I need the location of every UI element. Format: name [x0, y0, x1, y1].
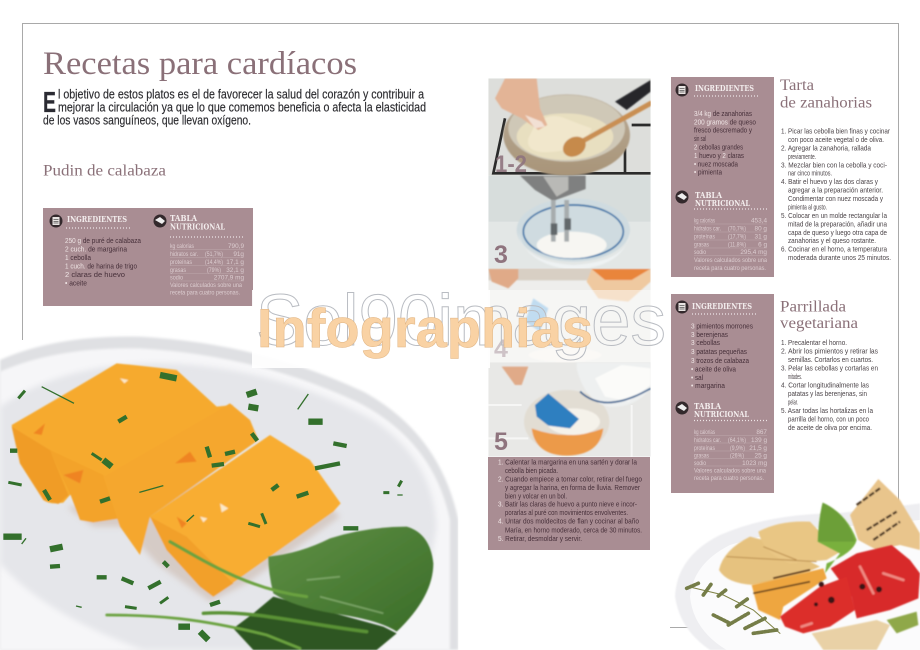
- icon: nutrition: [154, 214, 166, 228]
- panel: pudding steps: 4. Untar dos moldecitos de flan y cocinar al baño: [498, 516, 639, 525]
- icon: recipe book: [676, 300, 688, 314]
- nutrition table: (26%): [730, 452, 744, 460]
- panel: pudding steps: 5. Retirar, desmoldar y servir.: [498, 534, 582, 543]
- nutrition table: 17,1 g: [226, 259, 244, 266]
- nutrition table: sodio: [694, 249, 706, 256]
- intro text: [43, 87, 426, 128]
- text block: parrillada steps: parrilla del horno, con un poco: [788, 414, 869, 424]
- nutrition table: proteínas: [170, 259, 192, 266]
- ingredient list: 3 trozos de calabaza: [691, 356, 750, 365]
- nutrition table: 80 g: [755, 226, 767, 232]
- nutrition table: 295,4 mg: [740, 249, 767, 256]
- step photo 1-2: pan on stove: [488, 78, 651, 176]
- heading: tabla nutricional: TABLA: [170, 214, 197, 224]
- text block: parrillada steps: 4. Cortar longitudinalmente las: [781, 380, 869, 390]
- nutrition table: [694, 429, 767, 482]
- text block: parrillada steps: 2. Abrir los pimientos y retirar las: [781, 346, 878, 356]
- text block: tarta steps: agregar a la preparación anterior.: [788, 186, 883, 195]
- nutrition table: 21,5 g: [749, 445, 767, 452]
- icon: nutrition: [676, 402, 688, 414]
- intro text: l objetivo de estos platos es el de favorecer la salud del corazón y contribuir a: [58, 88, 424, 102]
- heading: parrillada vegetariana: [780, 298, 858, 332]
- panel: pudding steps: porarlas al puré con movimientos envolventes.: [505, 508, 628, 517]
- nutrition table: (11,8%): [728, 242, 746, 248]
- step numbers: 5: [494, 428, 508, 456]
- ingredient list: 3 patatas pequeñas: [691, 347, 747, 356]
- panel: pudding steps: y agregar la harina, en forma de lluvia. Remover: [505, 483, 640, 492]
- nutrition table: receta para cuatro personas.: [694, 475, 764, 482]
- step photo 5: folding whites: [488, 363, 651, 457]
- nutrition table: 790,9: [228, 243, 244, 250]
- ingredient list: 200 gramos de queso: [694, 117, 756, 126]
- text block: tarta steps: 2. Agregar la zanahoria, rallada: [781, 143, 872, 152]
- ingredient list: 2 claras de huevo: [65, 270, 125, 279]
- grilled toast: [850, 479, 920, 550]
- watermark: [252, 281, 666, 368]
- nutrition table: grasas: [170, 267, 186, 274]
- ingredient list: 3/4 kg de zanahorias: [694, 109, 752, 118]
- nutrition table: hidratos car.: [694, 226, 721, 232]
- text block: tarta steps: con poco aceite vegetal o de oliva.: [788, 135, 884, 144]
- text block: tarta steps: 4. Batir el huevo y las dos claras y: [781, 177, 878, 186]
- nutrition table: receta para cuatro personas.: [694, 265, 766, 272]
- step numbers: 4: [494, 335, 508, 363]
- text block: tarta steps: moderada durante unos 25 minutos.: [788, 253, 891, 262]
- nutrition table: 139 g: [751, 437, 767, 444]
- ingredient list: 2 cuch. de margarina: [65, 244, 128, 254]
- heading: tabla nutricional: NUTRICIONAL: [170, 222, 225, 232]
- nutrition table: 2707,9 mg: [214, 274, 244, 282]
- icon: recipe book: [676, 84, 688, 96]
- ingredient list: • nuez moscada: [694, 159, 739, 168]
- text block: parrillada steps: 5. Asar todas las hortalizas en la: [781, 406, 874, 415]
- text block: parrillada steps: mitades.: [788, 372, 802, 381]
- nutrition table: kg calorías: [694, 218, 715, 224]
- nutrition table: [694, 218, 767, 272]
- text block: parrillada steps: de aceite de oliva por encima.: [788, 423, 872, 432]
- ingredient list: • aceite de oliva: [691, 364, 737, 374]
- drop cap: E: [43, 87, 56, 119]
- step numbers: [494, 151, 527, 456]
- ingredient list: [65, 236, 142, 288]
- nutrition table: (79%): [207, 267, 221, 274]
- heading: tabla nutricional: NUTRICIONAL: [695, 199, 750, 209]
- nutrition table: proteínas: [694, 445, 715, 452]
- text block: tarta steps: previamente.: [788, 152, 816, 161]
- photo: grilled vegetables on plate: [675, 479, 920, 650]
- heading: ingredientes: INGREDIENTES: [692, 302, 752, 312]
- thyme sprig: [687, 583, 780, 633]
- watermark: Infographias: Infographias: [257, 297, 593, 359]
- ingredient list: 1 cebolla: [65, 253, 92, 262]
- zucchini and bottom toast: [812, 612, 918, 650]
- ingredient list: 250 g de puré de calabaza: [65, 236, 142, 245]
- panel: pudin ingredients and nutrition: [43, 208, 253, 306]
- nutrition table: Valores calculados sobre una: [694, 257, 767, 264]
- ingredient list: sin sal: [694, 134, 706, 143]
- nutrition table: sodio: [170, 274, 183, 282]
- ingredient list: [694, 109, 756, 177]
- icon: nutrition: [676, 190, 688, 204]
- intro text: mejorar la circulación ya que lo que comemos beneficia o afecta la elasticidad: [58, 100, 426, 114]
- nutrition table: (64,1%): [728, 437, 746, 444]
- nutrition table: kg calorías: [170, 243, 194, 250]
- lime wedge: [818, 503, 857, 573]
- panel: tarta ingredients and nutrition: [671, 77, 774, 277]
- heading: ingredientes: INGREDIENTES: [695, 84, 754, 94]
- heading: tarta de zanahorias: de zanahorias: [780, 94, 872, 112]
- ingredient list: 3 cebollas: [691, 338, 720, 347]
- nutrition table: grasas: [694, 242, 709, 248]
- step photo 4: faded bowl and brush: [488, 268, 651, 363]
- text block: tarta steps: 5. Colocar en un molde rectangular la: [781, 211, 888, 220]
- heading: tabla nutricional: [694, 402, 749, 420]
- text block: tarta steps: zanahorias y el queso rostante.: [788, 236, 876, 245]
- ingredient list: fresco descremado y: [694, 126, 752, 135]
- nutrition table: receta para cuatro personas.: [170, 290, 240, 296]
- ingredient list: 2 cebollas grandes: [694, 143, 743, 152]
- nutrition table: hidratos car.: [694, 437, 721, 444]
- text block: parrillada steps: semillas. Cortarlos en cuartos.: [788, 355, 873, 364]
- chives: [3, 375, 403, 640]
- text block: tarta steps: mitad de la preparación, añadir una: [788, 219, 888, 228]
- panel: pudding steps: 1. Calentar la margarina en una sartén y dorar la: [498, 458, 638, 466]
- nutrition table: (9,9%): [730, 445, 745, 452]
- text block: parrillada steps: 1. Precalentar el horno.: [781, 338, 847, 347]
- pumpkin slice: [752, 568, 827, 620]
- heading: parrillada vegetariana: Parrillada: [780, 298, 846, 316]
- panel: pudding steps: María, en horno moderado, cerca de 30 minutos.: [505, 526, 642, 534]
- pudding slices: [12, 363, 341, 602]
- nutrition table: 32,1 g: [226, 267, 244, 274]
- nutrition table: 31 g: [755, 234, 767, 240]
- heading: tarta de zanahorias: [780, 77, 872, 112]
- nutrition table: sodio: [694, 460, 706, 467]
- red peppers: [780, 545, 920, 633]
- plate: [0, 337, 458, 650]
- text block: tarta steps: Condimentar con nuez moscada y: [788, 194, 883, 203]
- nutrition table: (70,7%): [728, 226, 746, 232]
- ingredient list: 3 berenjenas: [691, 330, 728, 339]
- heading: parrillada vegetariana: vegetariana: [780, 315, 858, 332]
- nutrition table: Valores calculados sobre una: [170, 282, 242, 289]
- panel: pudding steps: bien y volcar en un bol.: [505, 491, 567, 500]
- text block: tarta steps: capa de queso y luego otra capa de: [788, 228, 887, 237]
- nutrition table: [170, 243, 244, 296]
- nutrition table: (14,4%): [205, 259, 223, 266]
- text block: tarta steps: 1. Picar las cebolla bien finas y cocinar: [781, 126, 890, 136]
- nutrition table: grasas: [694, 452, 709, 460]
- intro text: de los vasos sanguíneos, que llevan oxígeno.: [43, 114, 251, 128]
- nutrition table: (51,7%): [205, 251, 223, 258]
- ingredient list: • sal: [691, 373, 703, 382]
- panel: pudding steps: [488, 457, 650, 550]
- text block: parrillada steps: 3. Pelar las cebollas y cortarlas en: [781, 364, 878, 372]
- nutrition table: (17,7%): [728, 234, 746, 240]
- heading: tabla nutricional: [170, 214, 225, 232]
- panel: pudding steps: 3. Batir las claras de huevo a punto nieve e incor-: [498, 500, 637, 509]
- heading: tarta de zanahorias: Tarta: [780, 77, 814, 94]
- heading: ingredientes: INGREDIENTES: [67, 215, 127, 225]
- ingredient list: 1 huevo y 2 claras: [694, 151, 744, 160]
- step numbers: 3: [494, 241, 508, 269]
- nutrition table: 453,4: [751, 218, 767, 224]
- heading: tabla nutricional: TABLA: [694, 402, 721, 412]
- nutrition table: hidratos car.: [170, 251, 198, 258]
- text block: parrillada steps: pelar.: [788, 398, 798, 406]
- ingredient list: • pimienta: [694, 168, 723, 177]
- ingredient list: 1 cuch. de harina de trigo: [65, 262, 137, 270]
- heading: tabla nutricional: [695, 191, 750, 209]
- heading: tabla nutricional: NUTRICIONAL: [694, 410, 749, 420]
- panel: pudding steps: cebolla bien picada.: [505, 466, 558, 475]
- heading: tabla nutricional: TABLA: [695, 191, 722, 201]
- icon: recipe book: [50, 214, 62, 228]
- ingredient list: • margarina: [691, 381, 726, 390]
- nutrition table: 6 g: [758, 242, 767, 248]
- ingredient list: 3 pimientos morrones: [691, 322, 753, 330]
- panel: parrillada ingredients and nutrition: [671, 294, 774, 493]
- nutrition table: Valores calculados sobre una: [694, 468, 766, 474]
- step photo 3: mixer and bowl: [488, 176, 651, 270]
- nutrition table: 25 g: [755, 452, 767, 460]
- nutrition table: kg calorías: [694, 429, 715, 436]
- plate: [675, 503, 920, 650]
- nutrition table: proteínas: [694, 234, 715, 240]
- spinach leaves: [107, 527, 433, 650]
- title: Recetas para cardíacos: [43, 46, 357, 82]
- text block: tarta steps: pimienta al gusto.: [788, 202, 827, 212]
- text block: tarta steps: [781, 126, 891, 262]
- nutrition table: 91g: [233, 251, 244, 258]
- text block: tarta steps: nar cinco minutos.: [788, 169, 832, 178]
- potato slices: [719, 521, 843, 585]
- text block: tarta steps: 3. Mezclar bien con la cebolla y coci-: [781, 160, 887, 169]
- photo: pumpkin pudding on plate: [0, 337, 458, 650]
- watermark: Sol90images outline: Sol90images: [256, 281, 666, 361]
- ingredient list: [691, 322, 753, 390]
- text block: parrillada steps: [781, 338, 878, 432]
- ingredient list: • aceite: [65, 278, 87, 288]
- heading: Pudin de calabaza: Pudin de calabaza: [43, 162, 166, 180]
- step numbers: 1-2: [495, 151, 527, 178]
- nutrition table: 867: [756, 429, 767, 436]
- text block: tarta steps: 6. Cocinar en el horno, a temperatura: [781, 245, 888, 254]
- nutrition table: 1023 mg: [742, 460, 767, 467]
- panel: pudding steps: 2. Cuando empiece a tomar color, retirar del fuego: [498, 474, 642, 484]
- photo strip: preparation steps: [488, 78, 651, 457]
- text block: parrillada steps: patatas y las berenjenas, sin: [788, 389, 867, 398]
